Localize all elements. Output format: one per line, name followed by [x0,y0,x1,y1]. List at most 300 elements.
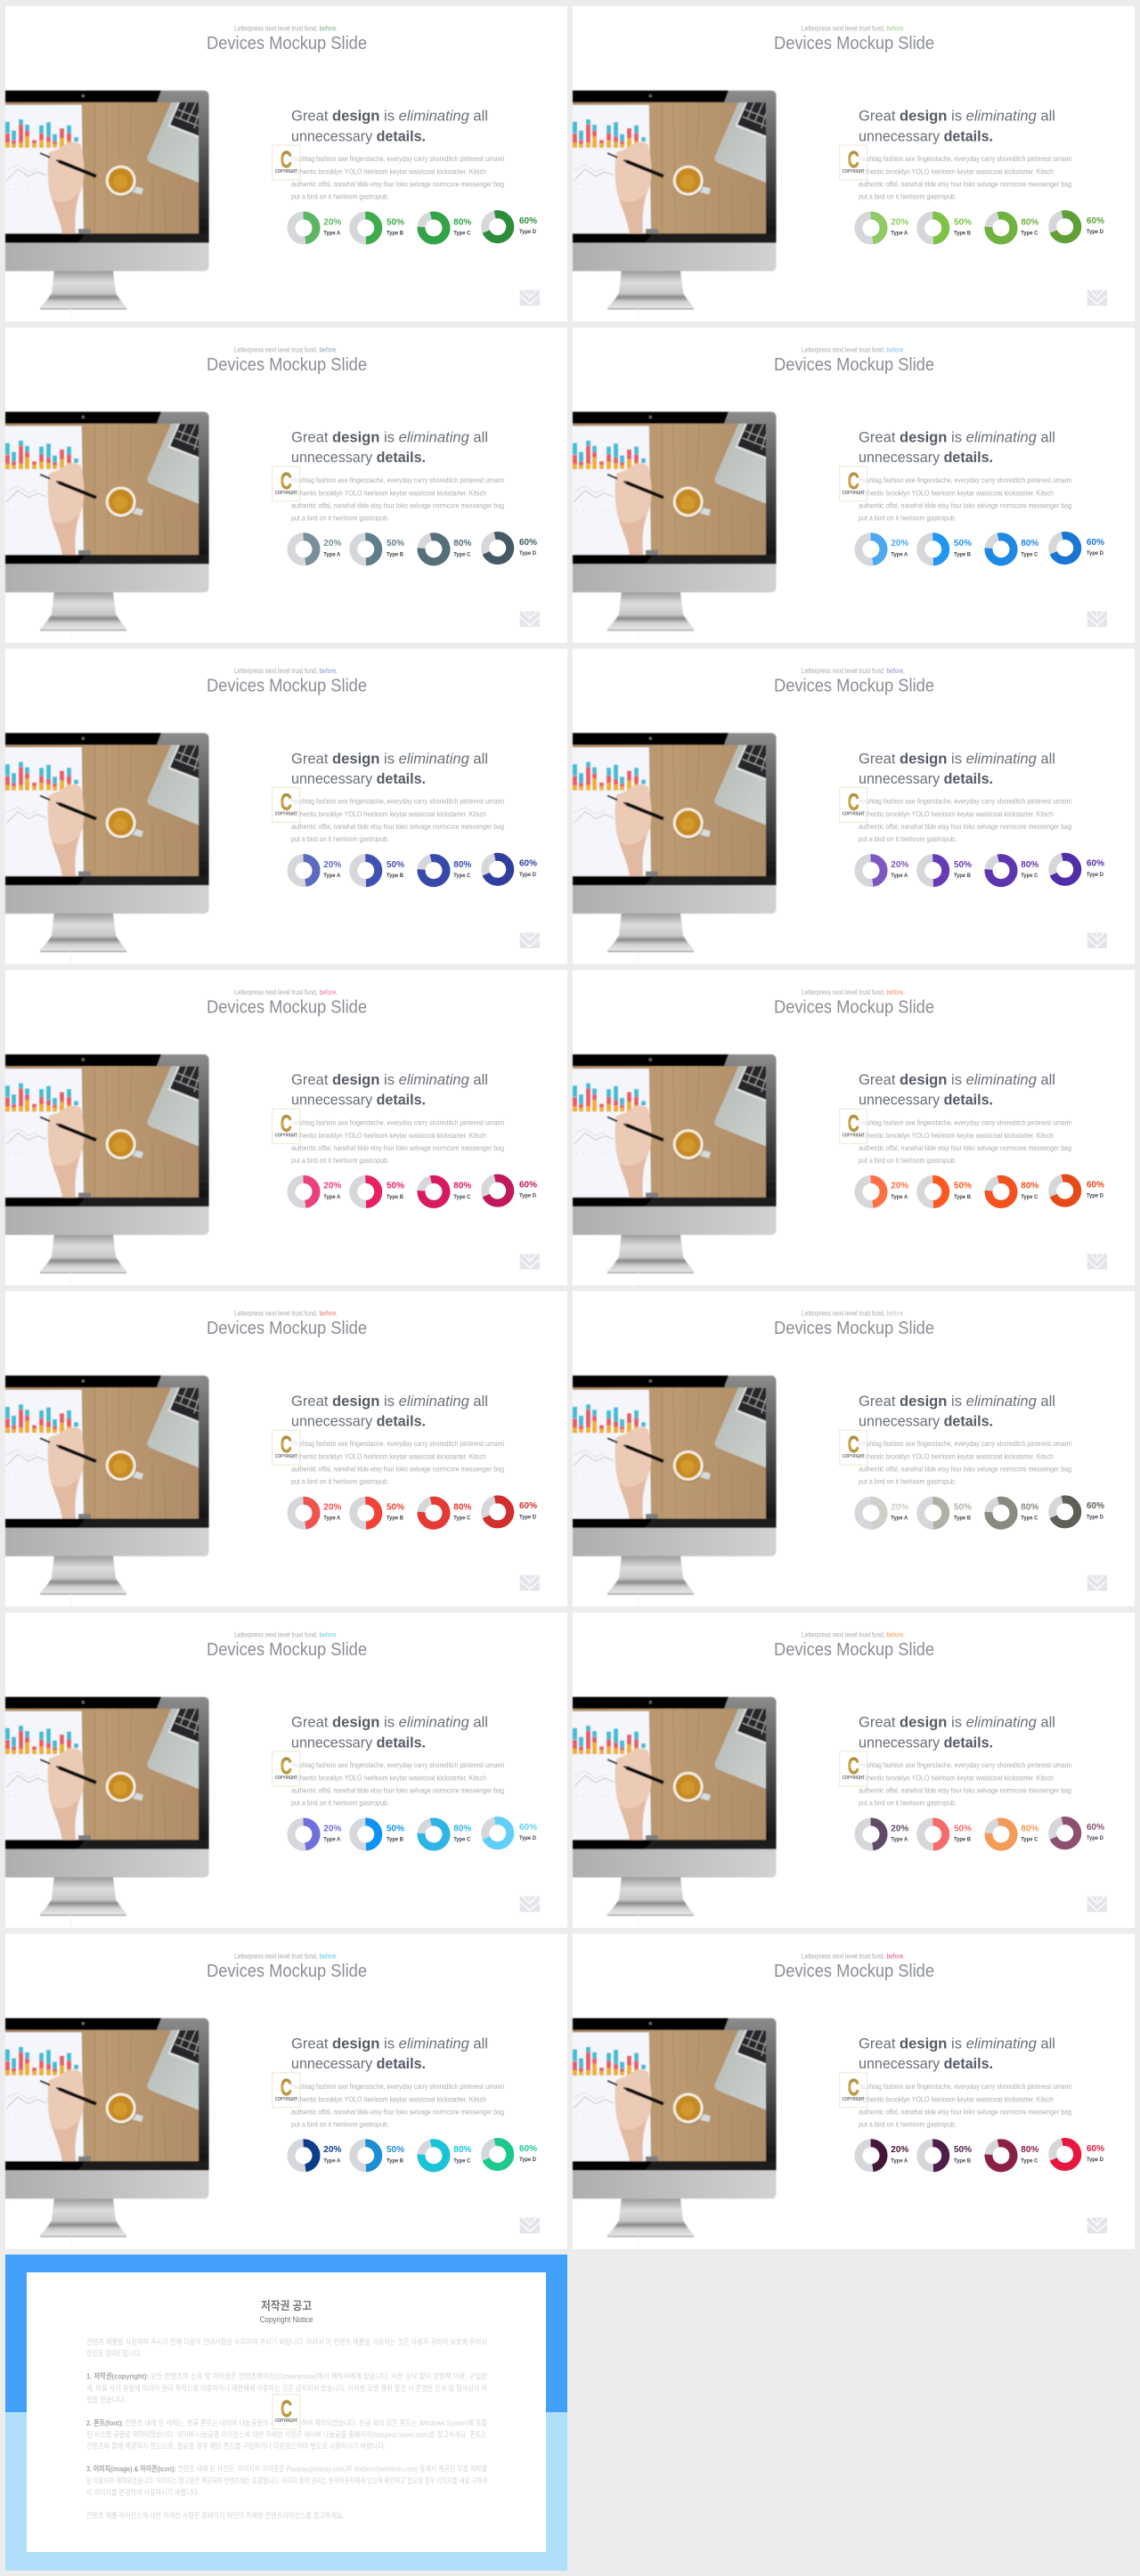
donut: Type B 50%: 50% [387,538,405,549]
donut: Type B 50%: Type B [387,1516,403,1522]
body text: Hashtag fashion axe fingerstache, everyday carry shoreditch pinterest umami [291,1117,504,1126]
icon: logo mark [1087,2217,1107,2233]
donut: Type B 50% [921,858,973,883]
body text: Hashtag fashion axe fingerstache, everyday carry shoreditch pinterest umami [859,1439,1071,1448]
donut: Type C 80%: Type C [1021,230,1038,237]
donut: Type D 60%: 60% [519,2143,538,2154]
donut: Type B 50%: 50% [387,1501,405,1512]
body text: authentic brooklyn YOLO heirloom keytar waistcoat kickstarter. Kitsch [859,167,1054,176]
copyright section 1 [86,2372,487,2404]
donut: Type A 20%: 20% [323,1501,342,1512]
heading: unnecessary details. [859,128,993,144]
body text [291,2082,504,2128]
panel: orange slide [573,970,1135,1285]
donut: Type B 50%: 50% [954,1823,973,1833]
heading [859,2036,1055,2072]
body text: authentic offal, narwhal tilde etsy four loko selvage normcore messenger bag [291,1465,504,1474]
donut: Type A 20% [291,2143,342,2168]
donut: Type C 80%: 80% [1021,1501,1039,1512]
donut: Type C 80%: Type C [1021,873,1038,879]
panel: red slide [5,1291,567,1606]
panel: copyright notice [5,2255,567,2571]
body text: Hashtag fashion axe fingerstache, everyday carry shoreditch pinterest umami [859,1117,1071,1126]
body text: put a bird on it heirloom gastropub. [291,192,389,201]
body text: put a bird on it heirloom gastropub. [859,513,957,522]
donut: Type A 20%: 20% [891,2144,909,2155]
heading [291,109,488,144]
donut: Type D 60%: 60% [1087,537,1105,548]
donut: Type C 80% [986,1177,1039,1207]
copyright section 1: 1. 저작권(copyright): 모든 컨텐츠의 소유 및 저작권은 컨텐츠메이트(Contentmate)에서 제작사에게 있습니다. 사전 승낙 없이 모방적 이용, 구입한 [86,2372,487,2381]
donut: Type A 20% [291,215,342,240]
watermark badge [273,2394,300,2429]
copyright section 3: 3. 이미지(image) & 아이콘(icon): 컨텐츠 내에 된 사진은, 이미지와 아이콘은 Pixabay(pixabay.com)와 Webicon(webicon.com) 등에서 제공된 무료 저작물 [86,2465,487,2474]
donut: Type D 60%: Type D [1087,1514,1103,1520]
device: desktop monitor mockup [573,2018,777,2249]
donut: Type B 50%: Type B [387,873,403,879]
icon: logo mark [520,2217,540,2233]
icon: logo mark [1087,290,1107,305]
panel: plum and coral slide [573,1613,1135,1928]
icon: logo mark [1087,932,1107,948]
donut: Type B 50%: 50% [387,1181,405,1191]
panel: slate slide [5,328,567,643]
donut: Type A 20%: 20% [891,538,909,549]
heading: Great design is eliminating all [859,109,1055,125]
donut: Type A 20%: 20% [891,1181,909,1191]
body text: put a bird on it heirloom gastropub. [291,1477,389,1486]
watermark badge: C [281,2074,292,2101]
watermark badge: C [848,2074,859,2101]
watermark badge [840,2073,867,2108]
donut: Type A 20%: 20% [323,216,342,227]
donut: Type C 80% [419,213,472,243]
device: desktop monitor mockup [573,1376,777,1606]
donut: Type B 50%: 50% [387,2144,405,2155]
body text: Hashtag fashion axe fingerstache, everyday carry shoreditch pinterest umami [291,2082,504,2091]
donut: Type C 80%: Type C [453,1836,471,1843]
watermark badge [840,1109,867,1143]
body text: authentic offal, narwhal tilde etsy four loko selvage normcore messenger bag [859,1786,1071,1795]
heading: Great design is eliminating all [291,1715,488,1731]
title: Devices Mockup Slide [207,33,367,53]
donut: Type A 20% [859,537,909,562]
body text: authentic offal, narwhal tilde etsy four loko selvage normcore messenger bag [291,1143,504,1152]
icon: logo mark [520,290,540,305]
donut: Type C 80%: Type C [453,551,471,557]
donut: Type A 20%: 20% [323,538,342,549]
watermark badge [273,1430,300,1465]
copyright heading: Copyright Notice [260,2315,314,2325]
panel: indigo slide [5,649,567,964]
heading: unnecessary details. [291,2056,426,2072]
body text: Hashtag fashion axe fingerstache, everyday carry shoreditch pinterest umami [291,1439,504,1448]
title: Devices Mockup Slide [207,1318,367,1338]
body text: put a bird on it heirloom gastropub. [291,2119,389,2128]
watermark badge: COPYRIGHT [275,2418,297,2424]
donut: Type A 20%: 20% [891,859,909,870]
donut: Type D 60%: Type D [1087,1193,1103,1199]
watermark badge: COPYRIGHT [843,2097,865,2102]
donut: Type C 80%: Type C [1021,1194,1038,1200]
body text: authentic brooklyn YOLO heirloom keytar waistcoat kickstarter. Kitsch [291,488,486,497]
device: desktop monitor mockup [5,411,208,643]
panel: gray slide [573,1291,1135,1606]
watermark badge: C [281,146,292,173]
donut: Type B 50% [354,215,405,240]
donut: Type C 80%: 80% [1021,1823,1039,1833]
donut: Type D 60%: 60% [519,1822,538,1832]
heading: Great design is eliminating all [859,1715,1055,1731]
body text [859,2082,1071,2128]
body text: authentic brooklyn YOLO heirloom keytar waistcoat kickstarter. Kitsch [859,1131,1054,1140]
donut: Type A 20%: Type A [323,1516,341,1522]
body text [859,1760,1071,1808]
icon: logo mark [520,1575,540,1590]
device: desktop monitor mockup [573,411,777,643]
donut: Type C 80%: Type C [1021,1836,1038,1843]
copyright section 2 [86,2418,487,2450]
donut: Type C 80%: 80% [453,1823,472,1833]
body text: authentic brooklyn YOLO heirloom keytar waistcoat kickstarter. Kitsch [291,1774,486,1783]
watermark badge [840,1751,867,1786]
body text: Hashtag fashion axe fingerstache, everyday carry shoreditch pinterest umami [859,2082,1071,2091]
body text [859,1439,1071,1486]
heading [859,1072,1055,1109]
body text [859,475,1071,522]
donut: Type C 80% [986,213,1039,243]
watermark badge [840,1430,867,1465]
body text [291,1439,504,1486]
body text: authentic offal, narwhal tilde etsy four loko selvage normcore messenger bag [291,180,504,189]
panel: light green slide [573,6,1135,321]
subtitle: Letterpress next level trust fund, before. [234,1952,338,1960]
watermark badge: C [848,1752,859,1779]
donut: Type B 50%: Type B [387,551,403,557]
watermark badge: C [848,1431,859,1458]
donut: Type B 50% [354,537,405,562]
donut: Type B 50% [354,1179,405,1204]
heading [859,1715,1055,1751]
panel: navy and teal slide [5,1934,567,2249]
heading: unnecessary details. [291,1093,426,1109]
heading: unnecessary details. [859,1093,993,1109]
body text: authentic brooklyn YOLO heirloom keytar waistcoat kickstarter. Kitsch [859,488,1054,497]
donut: Type A 20%: Type A [323,873,341,879]
heading: Great design is eliminating all [291,429,488,445]
watermark badge: C [281,1752,292,1779]
donut: Type D 60%: 60% [519,1500,538,1511]
watermark badge: COPYRIGHT [275,1133,297,1138]
copyright section 3: 이 이미지를 변경하여 사용하시기 바랍니다. [86,2488,200,2497]
donut: Type B 50%: Type B [387,2158,403,2164]
donut: Type D 60%: 60% [1087,858,1105,869]
donut: Type B 50% [921,537,973,562]
donut: Type B 50%: 50% [954,2144,973,2155]
subtitle: Letterpress next level trust fund, before. [234,667,338,675]
donut: Type C 80% [419,534,472,564]
subtitle: Letterpress next level trust fund, before. [234,345,338,353]
donut: Type B 50% [921,1179,973,1204]
donut: Type A 20% [859,2143,909,2168]
heading: unnecessary details. [291,128,426,144]
donut: Type C 80%: 80% [1021,1181,1039,1191]
body text: authentic offal, narwhal tilde etsy four loko selvage normcore messenger bag [859,1465,1071,1474]
donut: Type D 60%: Type D [519,550,536,557]
donut: Type B 50% [354,2143,405,2168]
device: desktop monitor mockup [5,91,208,321]
title: Devices Mockup Slide [774,1318,934,1338]
body text: Hashtag fashion axe fingerstache, everyday carry shoreditch pinterest umami [291,797,504,806]
donut: Type A 20%: 20% [891,1501,909,1512]
device: desktop monitor mockup [573,733,777,964]
body text [291,475,504,522]
body text: Hashtag fashion axe fingerstache, everyday carry shoreditch pinterest umami [291,154,504,163]
donut: Type D 60%: 60% [1087,1500,1105,1511]
body text: Hashtag fashion axe fingerstache, everyday carry shoreditch pinterest umami [859,797,1071,806]
body text: Hashtag fashion axe fingerstache, everyday carry shoreditch pinterest umami [291,475,504,484]
donut: Type B 50% [921,2143,973,2168]
heading: Great design is eliminating all [291,1072,488,1088]
body text: Hashtag fashion axe fingerstache, everyday carry shoreditch pinterest umami [291,1760,504,1769]
donut: Type C 80% [419,1819,472,1849]
body text [859,797,1071,843]
donut: Type D 60%: 60% [519,858,538,869]
donut: Type D 60% [483,1818,538,1848]
title: Devices Mockup Slide [207,1639,367,1660]
donut: Type B 50%: 50% [387,859,405,870]
donut: Type A 20%: Type A [323,230,341,237]
donut: Type C 80% [419,1499,472,1528]
watermark badge: COPYRIGHT [275,491,297,496]
body text: put a bird on it heirloom gastropub. [291,1156,389,1165]
donut: Type D 60%: Type D [519,1514,536,1520]
body text [291,154,504,201]
copyright intro: 컨텐츠 제품을 사용하여 주시기 전에 다음의 안내사항을 숙지하여 주시기 바랍니다. 따라서 이 컨텐츠 제품을 사용하는 것은 사용자 귀하의 보호에 유의사 [86,2337,487,2346]
donut: Type C 80% [419,2141,472,2170]
watermark badge: C [281,2395,292,2422]
heading [859,1394,1055,1430]
donut: Type C 80% [986,1499,1039,1528]
body text: authentic brooklyn YOLO heirloom keytar waistcoat kickstarter. Kitsch [291,809,486,818]
icon: logo mark [1087,1254,1107,1270]
body text: put a bird on it heirloom gastropub. [859,2119,957,2128]
device: desktop monitor mockup [5,1697,208,1928]
donut: Type B 50% [354,1500,405,1525]
body text: put a bird on it heirloom gastropub. [859,1799,957,1808]
donut: Type B 50%: 50% [954,1181,973,1191]
donut: Type D 60%: 60% [519,215,538,226]
heading: unnecessary details. [291,1413,426,1429]
donut: Type A 20%: Type A [323,1194,341,1200]
donut: Type B 50%: Type B [954,2158,971,2164]
heading [291,2036,488,2072]
donut: Type B 50%: 50% [387,1823,405,1833]
donut: Type A 20% [859,1822,909,1847]
donut: Type A 20% [291,1500,342,1525]
watermark badge [273,145,300,180]
watermark badge: C [281,467,292,494]
body text: Hashtag fashion axe fingerstache, everyday carry shoreditch pinterest umami [859,1760,1071,1769]
heading: unnecessary details. [859,771,993,787]
donut: Type D 60%: 60% [1087,1822,1105,1832]
watermark badge: COPYRIGHT [843,1454,865,1459]
donut: Type C 80%: Type C [1021,551,1038,557]
watermark badge: C [848,1109,859,1136]
icon: logo mark [520,611,540,627]
icon: logo mark [1087,1897,1107,1912]
donut: Type A 20%: 20% [323,2144,342,2155]
watermark badge: COPYRIGHT [843,812,865,817]
body text: put a bird on it heirloom gastropub. [859,1156,957,1165]
subtitle: Letterpress next level trust fund, before. [802,345,905,353]
donut: Type C 80%: Type C [453,873,471,879]
donut: Type A 20% [859,1500,909,1525]
donut: Type C 80%: Type C [1021,2158,1038,2164]
heading: Great design is eliminating all [291,1394,488,1410]
donut: Type B 50%: Type B [954,1516,971,1522]
body text: put a bird on it heirloom gastropub. [859,192,957,201]
heading: Great design is eliminating all [859,1072,1055,1088]
device: desktop monitor mockup [5,1054,208,1285]
donut: Type D 60% [1050,1176,1105,1206]
title: Devices Mockup Slide [207,354,367,375]
subtitle: Letterpress next level trust fund, before. [802,25,905,32]
watermark badge [273,467,300,501]
heading: unnecessary details. [859,1413,993,1429]
donut: Type A 20%: Type A [891,551,908,557]
donut: Type A 20%: Type A [891,230,908,237]
donut: Type C 80% [986,1819,1039,1849]
watermark badge [840,788,867,823]
heading: unnecessary details. [291,450,426,466]
donut: Type C 80%: 80% [453,859,472,870]
donut: Type D 60%: Type D [1087,872,1103,878]
heading [859,751,1055,787]
donut: Type C 80%: 80% [453,216,472,227]
body text: authentic offal, narwhal tilde etsy four loko selvage normcore messenger bag [859,2107,1071,2116]
donut: Type D 60%: Type D [519,872,536,878]
body text: put a bird on it heirloom gastropub. [859,834,957,843]
title: Devices Mockup Slide [207,676,367,696]
heading: Great design is eliminating all [859,429,1055,445]
body text: authentic brooklyn YOLO heirloom keytar waistcoat kickstarter. Kitsch [291,167,486,176]
donut: Type A 20%: Type A [891,873,908,879]
donut: Type D 60% [1050,1497,1105,1526]
donut: Type B 50%: Type B [954,230,971,237]
body text [291,797,504,843]
subtitle: Letterpress next level trust fund, before. [234,25,338,32]
donut: Type D 60% [1050,2140,1105,2169]
donut: Type C 80% [986,856,1039,885]
subtitle: Letterpress next level trust fund, before. [802,1952,905,1960]
watermark badge: C [281,1109,292,1136]
icon: logo mark [520,932,540,948]
copyright footer line: 컨텐츠 제품 라이선스에 대한 자세한 사항은 홈페이지 하단의 자세한 컨텐츠라이선스를 참고하세요. [86,2511,344,2520]
donut: Type B 50%: 50% [954,216,973,227]
icon: logo mark [1087,1575,1107,1590]
copyright section 3: 을 이용하여 제작되었습니다. 이미지는 참고용만 제공되며 컨텐츠에는 포함됩니다. 이미지 등의 권리는 원저작권자에게 있으며 확인하고 필요할 경우 이미지를 새로 구하여 [86,2476,487,2485]
copyright section 2: 된 시스템 글꼴로 제작되었습니다. 네이버 나눔글꼴 라이선스에 대한 자세한 사항은 네이버 나눔글꼴 홈페이지(hangeul.naver.com)를 참고하세요. 폰트는 [86,2430,487,2439]
body text: authentic offal, narwhal tilde etsy four loko selvage normcore messenger bag [291,822,504,831]
copyright section 3 [86,2465,487,2497]
donut: Type C 80%: 80% [1021,538,1039,549]
copyright intro [86,2337,487,2358]
device: desktop monitor mockup [5,2018,208,2249]
subtitle: Letterpress next level trust fund, before. [234,1631,338,1638]
donut: Type D 60%: Type D [1087,550,1103,557]
donut: Type B 50%: Type B [954,1836,971,1843]
heading: Great design is eliminating all [859,2036,1055,2052]
donut: Type D 60% [1050,212,1105,241]
donut: Type C 80%: Type C [1021,1516,1038,1522]
donut: Type A 20%: Type A [891,1836,908,1843]
subtitle: Letterpress next level trust fund, before. [802,1631,905,1638]
body text: authentic offal, narwhal tilde etsy four loko selvage normcore messenger bag [859,180,1071,189]
watermark badge: C [848,467,859,494]
body text: Hashtag fashion axe fingerstache, everyday carry shoreditch pinterest umami [859,154,1071,163]
body text: authentic brooklyn YOLO heirloom keytar waistcoat kickstarter. Kitsch [291,1131,486,1140]
donut: Type A 20%: 20% [891,216,909,227]
donut: Type B 50%: 50% [387,216,405,227]
donut: Type D 60%: Type D [519,1193,536,1199]
donut: Type C 80%: Type C [453,230,471,237]
donut: Type C 80%: 80% [453,538,472,549]
donut: Type D 60%: 60% [1087,2143,1105,2154]
heading: Great design is eliminating all [859,1394,1055,1410]
donut: Type A 20%: Type A [891,2158,908,2164]
heading: Great design is eliminating all [859,751,1055,767]
icon: logo mark [520,1254,540,1270]
donut: Type A 20% [859,858,909,883]
body text: authentic brooklyn YOLO heirloom keytar waistcoat kickstarter. Kitsch [859,2094,1054,2103]
heading: Great design is eliminating all [291,109,488,125]
watermark badge: COPYRIGHT [275,812,297,817]
donut: Type D 60% [1050,855,1105,884]
donut: Type A 20%: 20% [323,1181,342,1191]
donut: Type C 80%: Type C [453,1516,471,1522]
donut: Type C 80% [419,856,472,885]
watermark badge: C [848,146,859,173]
watermark badge: COPYRIGHT [275,1454,297,1459]
title: Devices Mockup Slide [774,676,934,696]
watermark badge [273,2073,300,2108]
heading: unnecessary details. [859,1735,993,1751]
donut: Type B 50% [354,1822,405,1847]
panel: burgundy and crimson slide [573,1934,1135,2249]
donut: Type A 20%: Type A [323,1836,341,1843]
donut: Type B 50%: Type B [954,551,971,557]
donut: Type D 60%: Type D [1087,2157,1103,2163]
panel: green slide [5,6,567,321]
body text: authentic brooklyn YOLO heirloom keytar waistcoat kickstarter. Kitsch [859,809,1054,818]
title: Devices Mockup Slide [207,996,367,1017]
subtitle: Letterpress next level trust fund, before. [802,667,905,675]
donut: Type D 60%: Type D [1087,1835,1103,1841]
watermark badge: COPYRIGHT [843,491,865,496]
title: Devices Mockup Slide [774,996,934,1017]
body text: authentic offal, narwhal tilde etsy four loko selvage normcore messenger bag [859,500,1071,509]
body text: authentic offal, narwhal tilde etsy four loko selvage normcore messenger bag [291,1786,504,1795]
donut: Type C 80%: Type C [453,1194,471,1200]
donut: Type A 20% [859,215,909,240]
donut: Type C 80%: 80% [453,1181,472,1191]
body text: Hashtag fashion axe fingerstache, everyday carry shoreditch pinterest umami [859,475,1071,484]
panel: violet and sky slide [5,1613,567,1928]
donut: Type B 50% [354,858,405,883]
donut: Type B 50%: 50% [954,538,973,549]
donut: Type B 50% [921,1500,973,1525]
